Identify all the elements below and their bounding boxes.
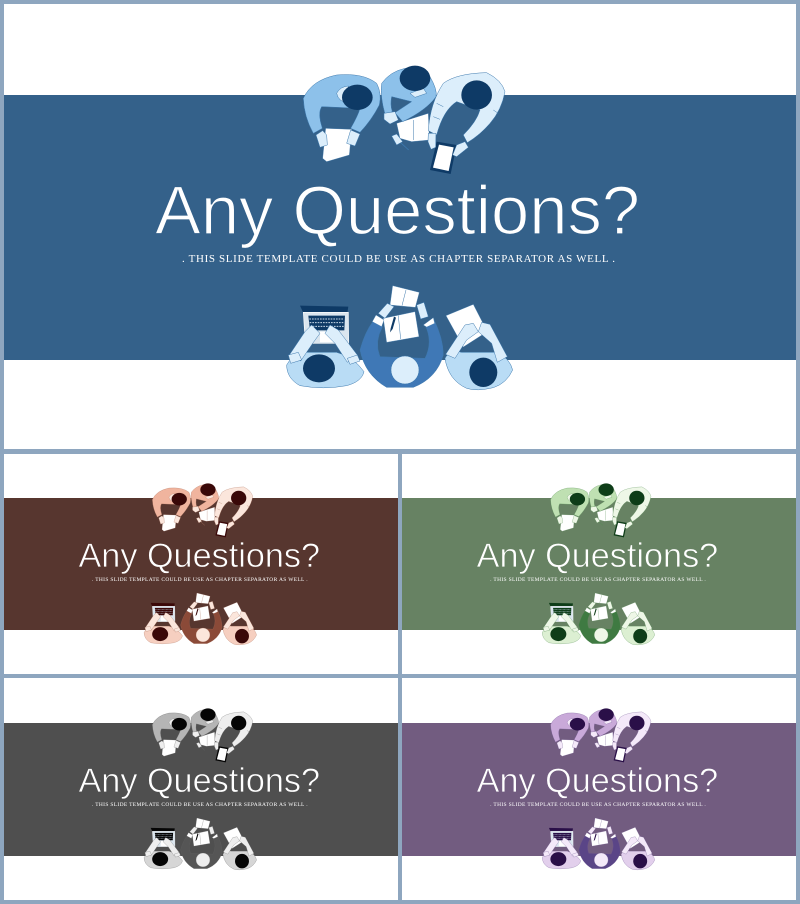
purple slide content [477, 708, 718, 870]
heading: Any Questions? [78, 762, 320, 800]
subtitle: . THIS SLIDE TEMPLATE COULD BE USE AS CHAPTER SEPARATOR AS WELL . [490, 577, 706, 583]
subtitle: . THIS SLIDE TEMPLATE COULD BE USE AS CHAPTER SEPARATOR AS WELL . [490, 802, 706, 808]
brown slide content [78, 483, 320, 645]
illustration: bottom team [144, 593, 257, 645]
subtitle: . THIS SLIDE TEMPLATE COULD BE USE AS CHAPTER SEPARATOR AS WELL . [92, 802, 308, 808]
panel: green slide [402, 454, 796, 674]
illustration: bottom team [144, 818, 257, 870]
illustration: bottom team [542, 818, 655, 870]
panel: purple slide [402, 678, 796, 900]
panel: blue main slide [4, 4, 796, 449]
subtitle: . THIS SLIDE TEMPLATE COULD BE USE AS CHAPTER SEPARATOR AS WELL . [92, 577, 308, 583]
gray slide content [78, 708, 320, 870]
illustration: top team [152, 483, 253, 537]
green slide content [477, 483, 718, 645]
panel: gray slide [4, 678, 398, 900]
heading: Any Questions? [155, 172, 640, 249]
illustration: three people at top, overhead view [303, 66, 505, 174]
subtitle: . THIS SLIDE TEMPLATE COULD BE USE AS CHAPTER SEPARATOR AS WELL . [182, 253, 615, 265]
illustration: top team [152, 708, 253, 762]
illustration: bottom team [542, 593, 655, 645]
illustration: top team [551, 708, 651, 762]
panel: brown slide [4, 454, 398, 674]
heading: Any Questions? [477, 762, 718, 800]
illustration: top team [551, 483, 651, 537]
heading: Any Questions? [477, 537, 718, 575]
heading: Any Questions? [78, 537, 320, 575]
illustration: three people at bottom, overhead view [287, 286, 513, 390]
